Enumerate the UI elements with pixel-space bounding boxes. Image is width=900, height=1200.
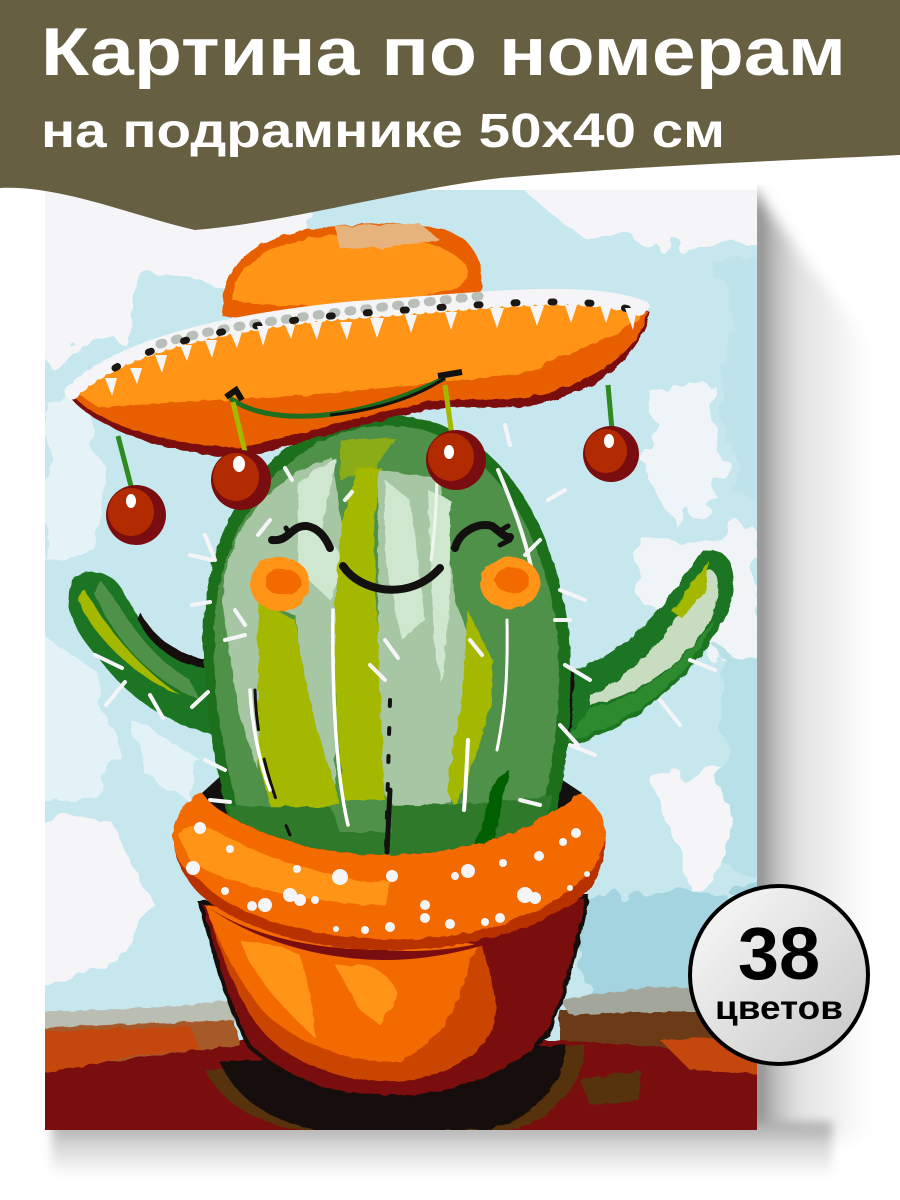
color count badge: цветов <box>715 989 843 1026</box>
pot rim <box>172 793 605 950</box>
color count badge <box>690 886 868 1064</box>
pot soil <box>202 777 582 815</box>
color count badge: 38 <box>738 912 820 995</box>
cheeks <box>250 557 540 611</box>
table surface <box>45 986 757 1130</box>
left arm <box>68 572 215 735</box>
sage panels <box>222 458 342 790</box>
cactus spines <box>95 425 715 805</box>
hat cord <box>226 372 462 416</box>
hat trim <box>72 293 648 392</box>
canvas shadow <box>52 185 885 1177</box>
painting: cactus in sombrero <box>45 190 757 1130</box>
hat crown <box>222 224 482 320</box>
bottom shade <box>228 795 552 860</box>
header banner <box>0 0 900 230</box>
eyes and smile <box>272 525 510 590</box>
subtitle: на подрамнике 50х40 см <box>41 105 725 158</box>
cactus body <box>203 415 571 860</box>
pot shadow <box>205 1045 585 1134</box>
pot body <box>200 897 587 1097</box>
title: Картина по номерам <box>41 14 846 90</box>
hat brim <box>68 300 650 458</box>
cactus ribs <box>250 470 535 852</box>
painting background <box>45 190 757 1041</box>
cherry stems <box>118 385 612 490</box>
dark rim shade <box>208 908 482 960</box>
rim dots <box>186 822 590 934</box>
cherries <box>106 385 639 545</box>
yellow-green bands <box>335 468 385 800</box>
face <box>250 525 540 611</box>
right arm <box>555 550 734 750</box>
hat trim drops <box>105 305 637 396</box>
